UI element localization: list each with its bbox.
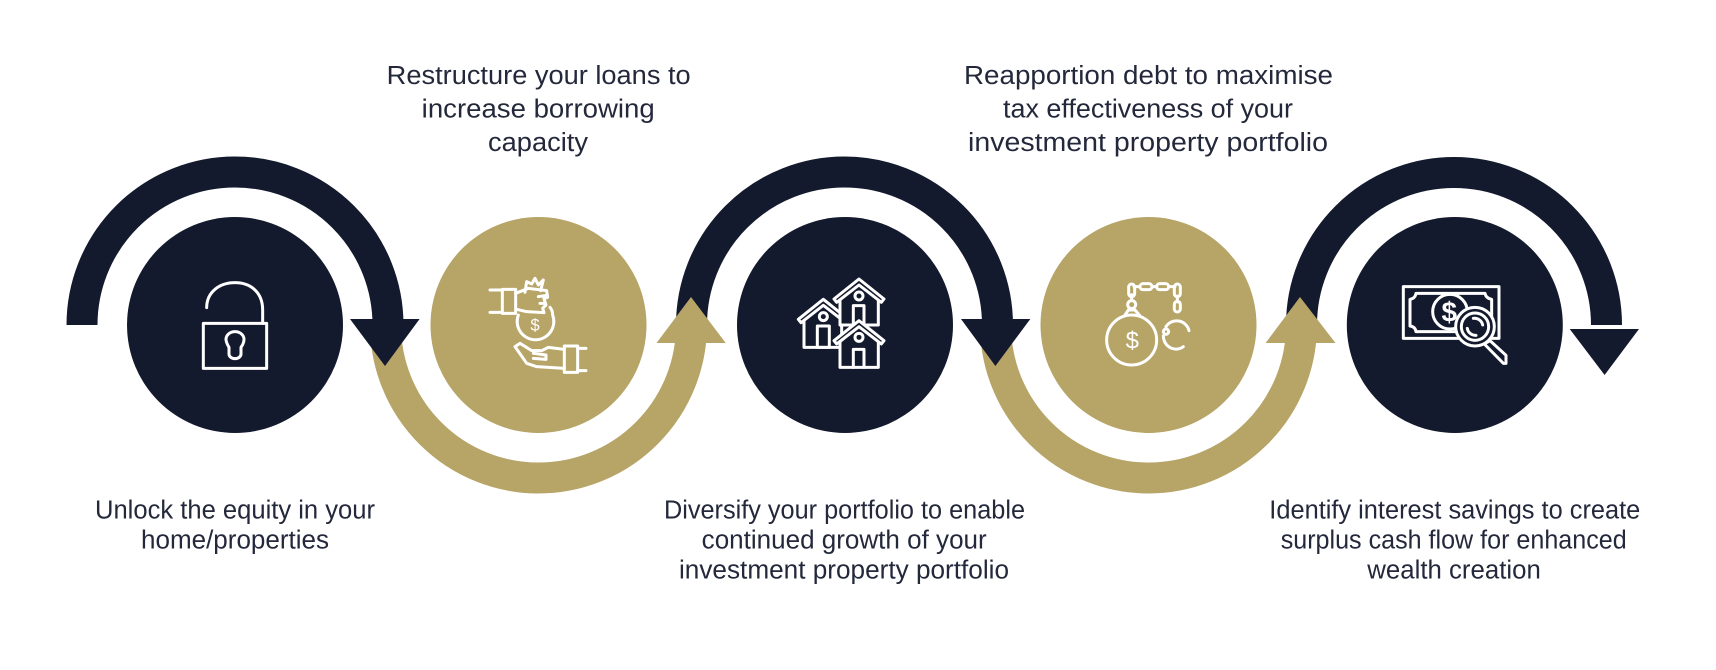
icon: hands exchanging money: $ [530,316,540,335]
icon: ball and chain with dollar: $ [1126,328,1139,355]
house top right [834,279,884,325]
text: step 2 caption: increase borrowing [422,96,655,124]
arrow: gold arc from step 4 to step 5 [996,297,1336,478]
text: step 3 caption: investment property portfolio [679,556,1009,584]
house bottom right [834,321,884,367]
arrow: dark arc into final step [1302,173,1639,375]
text: step 5 caption: Identify interest savings to create [1269,496,1640,524]
text: step 1 caption: Unlock the equity in your [95,496,376,524]
arrow: gold arc from step 2 to step 3 [386,297,726,478]
icon: banknote and magnifying glass: $ [1442,296,1458,327]
step 5 circle [1347,217,1563,433]
arrow: dark arc from step 1 to step 2 [82,172,420,366]
step 4 circle [1040,217,1256,433]
icon: banknote and magnifying glass [1403,287,1506,363]
step 3 circle [737,217,953,433]
text: step 4 caption: Reapportion debt to maximise [964,62,1333,90]
icon: open padlock [203,283,267,368]
text: step 4 caption: investment property portfolio [968,129,1328,157]
icon: hands exchanging money [490,278,586,372]
text: step 3 caption: continued growth of your [702,526,987,554]
text: step 5 caption: surplus cash flow for enhanced [1281,526,1627,554]
text: step 5 caption: wealth creation [1366,556,1541,584]
text: step 2 caption: capacity [488,129,588,157]
text: step 3 caption: Diversify your portfolio to enable [664,496,1025,524]
house left [798,299,848,347]
text: step 4 caption: tax effectiveness of your [1003,96,1294,124]
step 2 circle [430,217,646,433]
text: step 2 caption: Restructure your loans to [387,62,691,90]
text: step 1 caption: home/properties [141,526,329,554]
arrow: dark arc from step 3 to step 4 [692,172,1030,366]
icon: three houses [798,279,884,367]
step 1 circle [127,217,343,433]
icon: ball and chain with dollar [1107,284,1189,365]
